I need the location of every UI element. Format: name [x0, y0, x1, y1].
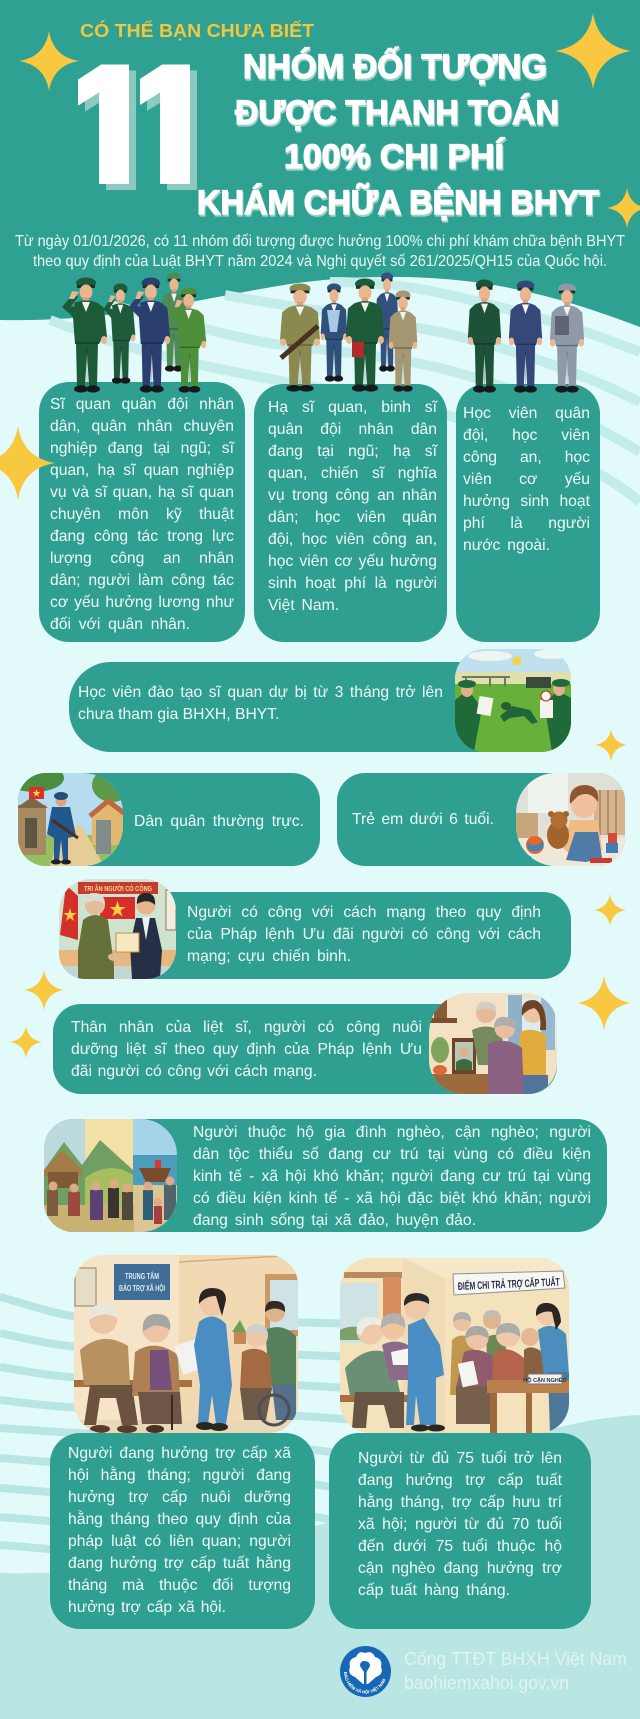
panel: militia: [18, 773, 320, 866]
text: foreign cadets: đội, học viên: [463, 427, 590, 444]
text: merit: [187, 904, 541, 965]
text: officers: lượng công an nhân: [50, 550, 234, 567]
text: non-commissioned: học viên cơ yếu hưởng: [268, 553, 437, 570]
text: elderly allowance: cận nghèo đang hưởng trợ: [358, 1560, 562, 1577]
big number 11: [78, 64, 197, 190]
text: poor households: [193, 1124, 591, 1229]
text: merit: Người có công với cách mạng theo quy định: [187, 904, 541, 921]
text: officers: đối với quân nhân.: [50, 616, 190, 633]
logo: Vietnam Social Security: [340, 1646, 391, 1697]
heading: kicker: CÓ THỂ BẠN CHƯA BIẾT: [80, 20, 315, 41]
text: foreign cadets: công an, học: [463, 449, 590, 466]
text: non-commissioned: sinh hoạt phí là người: [268, 575, 437, 592]
illustration: social protection centre: [74, 1255, 298, 1433]
soldiers group 3: [468, 280, 584, 393]
text: elderly allowance: Người từ đủ 75 tuổi trở lên: [358, 1450, 562, 1467]
illustration: veteran receiving certificate: TRI ÂN NGƯỜI CÓ CÔNG: [84, 884, 152, 893]
text: officers: nghiệp đang tại ngũ; sĩ: [50, 440, 234, 457]
bottom wave: [0, 1415, 640, 1719]
text: elderly allowance: [358, 1450, 562, 1599]
text: reserve trainees: [78, 684, 443, 723]
main title: ĐƯỢC THANH TOÁN: [235, 94, 559, 132]
text: reserve trainees: chưa tham gia BHXH, BHYT.: [78, 706, 279, 723]
panel: poor households and remote areas: [44, 1119, 607, 1232]
panel: non-commissioned card: [254, 384, 447, 642]
text: elderly allowance: cấp tuất hàng tháng.: [358, 1582, 510, 1599]
illustration: survivor allowance payment point: [340, 1258, 569, 1433]
main title: 100% CHI PHÍ: [284, 138, 506, 176]
text: reserve trainees: Học viên đào tạo sĩ quan dự bị từ 3 tháng trở lên: [78, 684, 443, 701]
footer source text: baohiemxahoi.gov.vn: [404, 1672, 569, 1693]
text: foreign cadets: nước ngoài.: [463, 537, 550, 554]
text: non-commissioned: dân; học viên quân: [268, 509, 437, 526]
panel: children under 6: [337, 773, 625, 866]
illustration: social protection centre: BẢO TRỢ XÃ HỘI: [119, 1284, 165, 1293]
text: poor households: dân tộc thiểu số đang cư trú tại vùng có điều kiện: [193, 1146, 591, 1163]
text: officers: [50, 396, 235, 633]
text: martyrs' relatives: dưỡng liệt sĩ theo quy định của Pháp lệnh Ưu: [71, 1041, 422, 1058]
text: non-commissioned: Việt Nam.: [268, 597, 339, 614]
text: officers: dân; người làm công tác: [50, 572, 234, 589]
panel: persons with revolutionary merit: [59, 892, 571, 979]
illustration: social protection centre: TRUNG TÂM: [125, 1272, 159, 1281]
text: poor households: đang sinh sống tại xã đảo, huyện đảo.: [193, 1212, 476, 1229]
footer source text: [404, 1648, 627, 1693]
text: elderly allowance: đang hưởng trợ cấp tuất: [358, 1472, 562, 1489]
text: poor households: Người thuộc hộ gia đình nghèo, cận nghèo; người: [193, 1124, 591, 1141]
text: officers: dân, quân nhân chuyên: [50, 418, 234, 435]
text: elderly allowance: đến dưới 75 tuổi thuộc hộ: [358, 1538, 562, 1555]
text: martyrs' relatives: Thân nhân của liệt sĩ, người có công nuôi: [71, 1019, 422, 1036]
text: merit: của Pháp lệnh Ưu đãi người có công với cách: [187, 926, 541, 943]
illustration: highlands and islands: [44, 1119, 177, 1232]
illustration: child with teddy: [516, 773, 625, 866]
soldiers group 1: [62, 272, 206, 393]
text: children: Trẻ em dưới 6 tuổi.: [352, 811, 494, 828]
text: social allowance: hằng tháng theo quy định của: [68, 1511, 291, 1528]
text: social allowance: [68, 1445, 291, 1616]
text: social allowance: hưởng trợ cấp xã hội.: [68, 1599, 226, 1616]
illustration: training field: [455, 649, 571, 752]
panel: martyrs' relatives: [53, 1004, 557, 1094]
text: merit: mạng; cựu chiến binh.: [187, 948, 351, 965]
soldiers group 2: [279, 272, 418, 392]
text: militia: Dân quân thường trực.: [134, 813, 304, 830]
text: foreign cadets: Học viên quân: [463, 405, 590, 422]
panel: monthly social allowance: [50, 1433, 315, 1629]
text: poor households: có điều kiện kinh tế - xã hội đặc biệt khó khăn; người: [193, 1190, 591, 1207]
text: non-commissioned: đang tại ngũ; hạ sĩ: [268, 443, 437, 460]
text: non-commissioned: Hạ sĩ quan, binh sĩ: [268, 399, 437, 416]
lower stripes: [0, 1297, 400, 1596]
text: non-commissioned: đội, học viên công an,: [268, 531, 437, 548]
panel: foreign cadets card: [456, 384, 600, 642]
text: social allowance: đang hưởng trợ cấp tuất hằng: [68, 1555, 291, 1572]
text: social allowance: hưởng trợ cấp nuôi dưỡng: [68, 1489, 291, 1506]
text: social allowance: Người đang hưởng trợ cấp xã: [68, 1445, 291, 1462]
text: elderly allowance: hằng tháng, trợ cấp hưu trí: [358, 1494, 562, 1511]
main title: NHÓM ĐỐI TƯỢNG: [243, 47, 547, 86]
text: officers: quan, hạ sĩ quan nghiệp: [50, 462, 234, 479]
text: officers: cơ yếu hưởng lương như: [50, 594, 234, 611]
text: foreign cadets: viên cơ yếu: [463, 471, 590, 488]
intro text: theo quy định của Luật BHYT năm 2024 và Nghị quyết số 261/2025/QH15 của Quốc hội.: [33, 253, 607, 270]
text: foreign cadets: phí là người: [463, 515, 590, 532]
text: non-commissioned: [268, 399, 438, 614]
intro text: [15, 233, 625, 270]
panel: reserve officer trainees: [69, 662, 571, 752]
text: social allowance: pháp luật có liên quan; người: [68, 1533, 291, 1550]
header band: [0, 0, 640, 327]
logo: Vietnam Social Security: BẢO HIỂM XÃ HỘI VIỆT NAM: [344, 1672, 386, 1694]
panel: officers card: [39, 382, 245, 642]
text: foreign cadets: [463, 405, 590, 554]
text: officers: Sĩ quan quân đội nhân: [50, 396, 234, 413]
text: officers: đang công tác trong lực: [50, 528, 234, 545]
text: foreign cadets: hưởng sinh hoạt: [463, 493, 590, 510]
upper stripes: [50, 282, 640, 502]
illustration: veteran receiving certificate: [59, 879, 176, 979]
text: officers: chuyên môn kỹ thuật: [50, 506, 234, 523]
illustration: militia guard: [18, 773, 123, 866]
text: martyrs' relatives: [71, 1019, 422, 1080]
footer source text: Cổng TTĐT BHXH Việt Nam: [404, 1648, 627, 1669]
text: elderly allowance: xã hội; người từ đủ 70 tuổi: [358, 1516, 562, 1533]
text: martyrs' relatives: đãi người có công với cách mạng.: [71, 1063, 317, 1080]
text: non-commissioned: vụ trong công an nhân: [268, 487, 437, 504]
illustration: family with martyr portrait: [429, 993, 557, 1094]
text: non-commissioned: quân đội nhân dân: [268, 421, 437, 438]
illustration: survivor allowance payment point: HỘ CẬN NGHÈO: [523, 1376, 567, 1384]
text: officers: vụ và sĩ quan, hạ sĩ quan: [50, 484, 234, 501]
text: social allowance: hội hằng tháng; người đang: [68, 1467, 291, 1484]
text: non-commissioned: quan, chiến sĩ nghĩa: [268, 465, 437, 482]
panel: elderly allowance: [329, 1433, 591, 1629]
text: social allowance: tháng mà thuộc đối tượng: [68, 1577, 291, 1594]
main title: [197, 46, 600, 223]
text: poor households: kinh tế - xã hội khó khăn; người đang cư trú tại vùng: [193, 1168, 591, 1185]
main title: KHÁM CHỮA BỆNH BHYT: [197, 184, 599, 222]
